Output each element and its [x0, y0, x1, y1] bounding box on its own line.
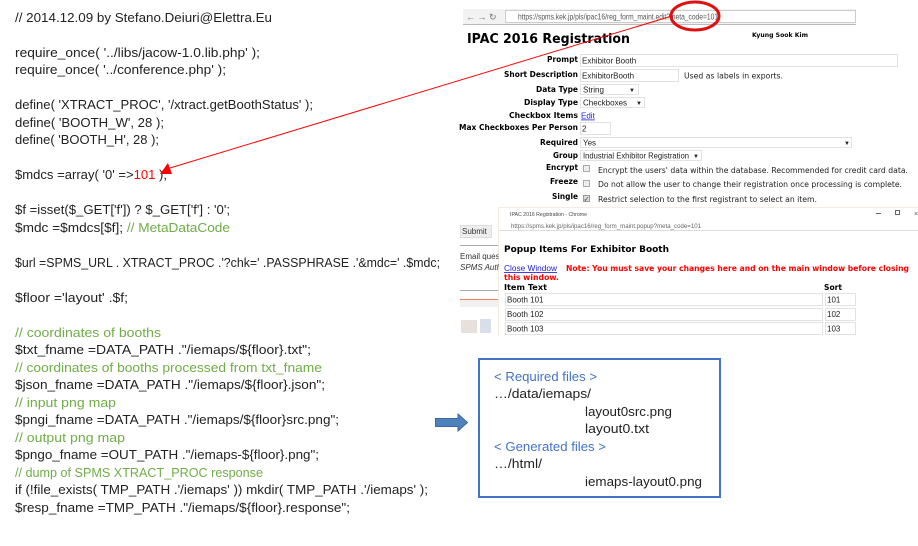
code: file paths: // coordinates of booths processed from txt_fname	[15, 361, 322, 375]
code: file paths: // coordinates of booths	[15, 326, 161, 340]
popup address bar: https://spms.kek.jp/pls/ipac16/reg_form_maint.popup?meta_code=101	[511, 224, 702, 230]
panel: registration form screenshot	[459, 9, 908, 333]
generated file name: iemaps-layout0.png	[585, 475, 702, 489]
booth items table: Sort	[824, 283, 842, 292]
panel: required and generated files	[479, 359, 720, 497]
code: url: $url =SPMS_URL . XTRACT_PROC .'?chk=' .PASSPHRASE .'&mdc=' .$mdc;	[15, 256, 440, 270]
form fields: Freeze	[550, 177, 579, 186]
form fields: ▼	[844, 141, 850, 147]
popup title bar: IPAC 2016 Registration - Chrome	[510, 212, 587, 218]
form fields: ▼	[629, 88, 635, 94]
data path: …/data/iemaps/	[494, 387, 592, 401]
form fields: String	[583, 86, 604, 94]
booth items table	[504, 283, 856, 334]
code: meta data code selection: $f =isset($_GET['f']) ? $_GET['f'] : '0';	[15, 203, 230, 217]
form fields: Do not allow the user to change their registration once processing is complete.	[598, 180, 902, 189]
code: file paths: $resp_fname =TMP_PATH ."/iemaps/${floor}.response";	[15, 501, 350, 515]
code: file paths: // input png map	[15, 396, 116, 410]
submit button and page footer	[460, 226, 502, 333]
code: file paths: $pngo_fname =OUT_PATH ."/iemaps-${floor}.png";	[15, 448, 319, 462]
submit button and page footer: SPMS Auth	[460, 263, 502, 272]
generated files heading: < Generated files >	[494, 440, 606, 454]
required file names: layout0src.png	[585, 405, 672, 419]
code: file paths: // output png map	[15, 431, 125, 445]
popup heading: Popup Items For Exhibitor Booth	[504, 245, 669, 255]
form fields: Industrial Exhibitor Registration	[583, 152, 689, 160]
booth items table: Booth 101	[507, 296, 544, 304]
form fields: Display Type	[524, 98, 579, 107]
form title: IPAC 2016 Registration	[467, 32, 630, 47]
browser toolbar: ← → ↻	[466, 12, 497, 22]
code: require statements: require_once( '../conference.php' );	[15, 63, 226, 77]
booth items table: 102	[827, 310, 841, 319]
browser toolbar: https://spms.kek.jp/pls/ipac16/reg_form_maint.edit?meta_code=101	[518, 12, 718, 22]
required files heading: < Required files >	[494, 370, 597, 384]
html path: …/html/	[494, 457, 543, 471]
code: define statements: define( 'BOOTH_W', 28 );	[15, 116, 164, 130]
form fields: ▼	[636, 101, 642, 107]
browser toolbar	[463, 9, 856, 25]
form fields	[459, 54, 908, 204]
booth items table: 103	[827, 324, 841, 334]
form fields: Single	[552, 192, 579, 201]
arrow: from meta_code in URL to value 101	[160, 16, 672, 174]
submit button and page footer: Email ques	[460, 252, 500, 261]
arrow: code to file list	[436, 414, 468, 431]
popup title bar: ×	[914, 211, 918, 218]
submit button and page footer: Submit	[462, 227, 488, 236]
form fields: Prompt	[547, 55, 578, 64]
code: require statements	[15, 46, 260, 77]
form fields: Yes	[583, 138, 596, 148]
form fields: Encrypt the users' data within the database. Recommended for credit card data.	[598, 166, 908, 175]
code: floor: $floor ='layout' .$f;	[15, 291, 128, 305]
form fields: Group	[553, 151, 578, 160]
required file names: layout0.txt	[585, 422, 650, 436]
popup title bar	[510, 210, 918, 218]
code: file paths: if (!file_exists( TMP_PATH .'/iemaps' )) mkdir( TMP_PATH .'/iemaps' );	[15, 483, 428, 497]
booth items table: Item Text	[504, 283, 547, 292]
warning note: this window.	[504, 273, 559, 282]
form fields: Required	[540, 138, 578, 147]
code: require statements: require_once( '../libs/jacow-1.0.lib.php' );	[15, 46, 260, 60]
booth items table: Booth 103	[507, 324, 544, 334]
booth items table: Booth 102	[507, 310, 544, 319]
code: file paths	[15, 326, 428, 515]
required file names	[585, 405, 672, 436]
form fields: Restrict selection to the first registrant to select an item.	[598, 195, 817, 204]
form fields: 2	[582, 124, 587, 134]
form fields: Used as labels in exports.	[684, 72, 783, 80]
code: meta data code selection	[15, 203, 230, 235]
code: define statements: define( 'BOOTH_H', 28 );	[15, 133, 159, 147]
code: meta data code selection: $mdc =$mdcs[$f]; // MetaDataCode	[15, 221, 230, 235]
code: define statements: define( 'XTRACT_PROC', '/xtract.getBoothStatus' );	[15, 98, 313, 112]
code: file paths: $txt_fname =DATA_PATH ."/iemaps/${floor}.txt";	[15, 343, 311, 357]
form fields: Checkbox Items	[509, 111, 578, 120]
close window link: Close Window	[504, 263, 558, 273]
form fields: Checkboxes	[583, 98, 627, 108]
form fields: Exhibitor Booth	[582, 56, 636, 66]
form fields: Data Type	[536, 85, 579, 94]
form fields: ExhibitorBooth	[582, 72, 634, 80]
code: file paths: $json_fname =DATA_PATH ."/iemaps/${floor}.json";	[15, 378, 325, 392]
form fields: Encrypt	[546, 163, 578, 172]
form fields: Short Description	[504, 70, 578, 79]
form fields: ✓	[584, 196, 589, 204]
user name: Kyung Sook Kim	[752, 32, 808, 39]
code: file paths: // dump of SPMS XTRACT_PROC response	[15, 466, 263, 480]
code: mdcs array with highlighted value: $mdcs =array( '0' => 101 );	[15, 168, 167, 182]
panel: PHP source code	[15, 11, 440, 515]
form fields: ▼	[693, 154, 699, 160]
panel: popup window screenshot	[498, 208, 918, 336]
warning note	[504, 264, 909, 282]
booth items table: 101	[827, 296, 841, 304]
code: define statements	[15, 98, 313, 147]
callout: red circle around meta_code	[671, 2, 719, 30]
code: author comment: // 2014.12.09 by Stefano.Deiuri@Elettra.Eu	[15, 11, 272, 25]
code: file paths: $pngi_fname =DATA_PATH ."/iemaps/${floor}src.png";	[15, 413, 339, 427]
form fields: Edit	[581, 112, 596, 120]
warning note: Note: You must save your changes here and on the main window before closing	[566, 264, 909, 273]
form fields: Max Checkboxes Per Person	[459, 123, 578, 132]
